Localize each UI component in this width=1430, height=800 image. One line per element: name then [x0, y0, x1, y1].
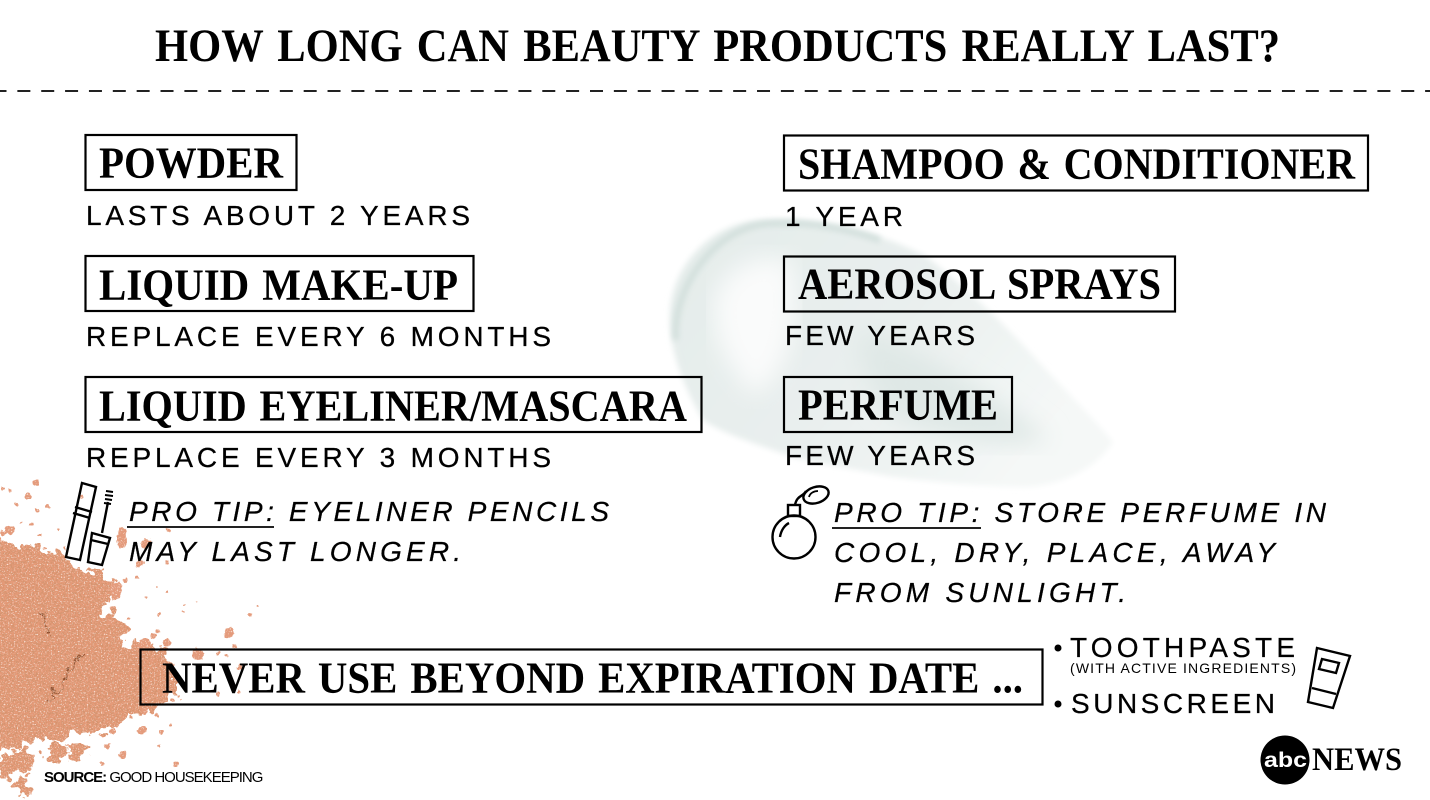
item: liquid eyeliner and mascara: [86, 377, 702, 473]
item: perfume: FEW YEARS: [785, 440, 975, 471]
item: liquid make-up: LIQUID MAKE-UP: [99, 260, 458, 310]
item: shampoo and conditioner: 1 YEAR: [785, 201, 903, 232]
dashed divider: [0, 90, 1430, 92]
logo: abc news: abc: [1264, 749, 1307, 772]
item: shampoo and conditioner: SHAMPOO & CONDITIONER: [798, 140, 1356, 188]
list: products with expiration dates: SUNSCREEN: [1071, 688, 1275, 719]
item: shampoo and conditioner: [784, 136, 1368, 232]
powder scatter: [0, 480, 259, 767]
pro tip: eyeliner: PRO TIP: EYELINER PENCILS: [129, 496, 609, 527]
pro tip: eyeliner: MAY LAST LONGER.: [129, 536, 461, 567]
pro tip: perfume: COOL, DRY, PLACE, AWAY: [834, 537, 1277, 568]
title: HOW LONG CAN BEAUTY PRODUCTS REALLY LAST?: [155, 20, 1280, 72]
pro tip: perfume: PRO TIP: STORE PERFUME IN: [834, 497, 1327, 528]
pro tip: perfume: FROM SUNLIGHT.: [834, 577, 1126, 608]
pro tip: eyeliner: [127, 496, 609, 567]
pro tip: perfume: [832, 497, 1327, 608]
item: liquid make-up: REPLACE EVERY 6 MONTHS: [86, 321, 551, 352]
cream smear: [670, 219, 1113, 487]
powder pile: [0, 540, 177, 796]
item: perfume: [784, 377, 1012, 471]
list: products with expiration dates: (WITH ACTIVE INGREDIENTS): [1070, 660, 1296, 676]
item: liquid eyeliner and mascara: REPLACE EVERY 3 MONTHS: [86, 442, 551, 473]
item: powder: POWDER: [99, 138, 284, 188]
item: liquid make-up: [86, 256, 551, 352]
item: powder: LASTS ABOUT 2 YEARS: [86, 200, 470, 231]
item: perfume: PERFUME: [798, 380, 998, 430]
item: aerosol sprays: FEW YEARS: [785, 320, 975, 351]
icon: perfume bottle: [772, 483, 831, 558]
icon: mascara and eyeliner: [66, 483, 113, 565]
list: products with expiration dates: TOOTHPASTE: [1070, 632, 1295, 663]
item: aerosol sprays: [784, 256, 1175, 351]
logo: abc news: [1260, 736, 1402, 784]
item: liquid eyeliner and mascara: LIQUID EYELINER/MASCARA: [99, 382, 687, 430]
item: powder: [86, 135, 470, 231]
item: aerosol sprays: AEROSOL SPRAYS: [798, 260, 1161, 308]
logo: abc news: NEWS: [1312, 742, 1402, 778]
source: SOURCE: GOOD HOUSEKEEPING: [44, 769, 263, 786]
icon: tube: [1308, 648, 1350, 708]
callout: never use beyond expiration date: NEVER USE BEYOND EXPIRATION DATE ...: [162, 654, 1023, 702]
list: products with expiration dates: [1054, 632, 1296, 719]
